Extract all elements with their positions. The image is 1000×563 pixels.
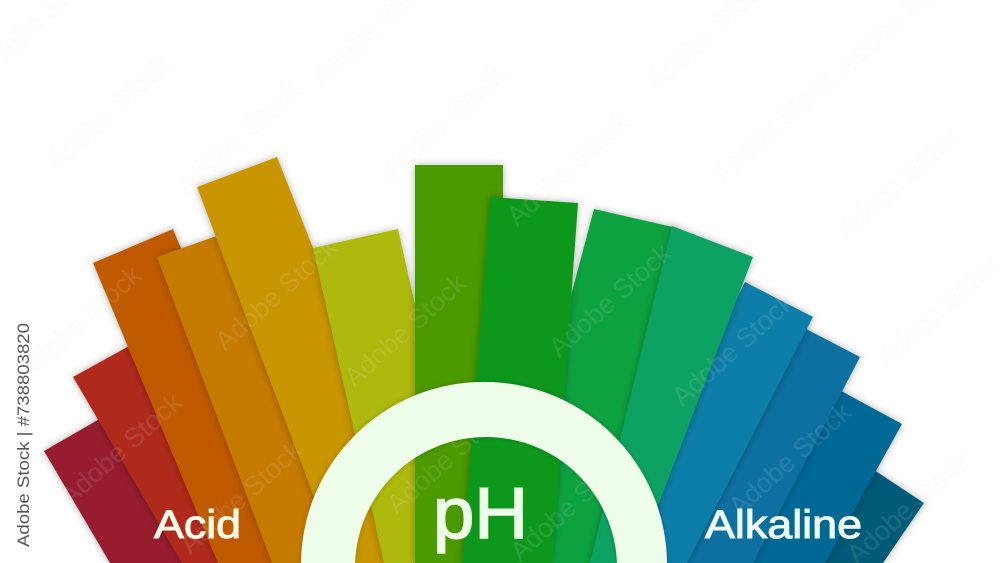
bar: red	[73, 340, 270, 563]
watermark pattern: Adobe Stock	[543, 238, 677, 363]
bar: dark blue	[720, 385, 902, 563]
bar: light blue	[600, 282, 813, 563]
label: pH: pH	[433, 474, 528, 554]
watermark pattern: Adobe Stock	[209, 232, 343, 357]
bar: mid blue	[650, 321, 860, 563]
bar: green	[462, 197, 578, 563]
watermark pattern: Adobe Stock	[504, 442, 638, 563]
pale ring around pH label	[301, 382, 667, 563]
label: Alkaline: Alkaline	[705, 503, 862, 547]
watermark pattern: Adobe Stock	[376, 60, 510, 185]
watermark pattern: Adobe Stock	[338, 268, 472, 393]
watermark pattern: Adobe Stock	[706, 65, 840, 190]
bar: amber	[197, 157, 438, 563]
watermark pattern: Adobe Stock	[831, 120, 965, 245]
watermark pattern: Adobe Stock	[381, 395, 515, 520]
watermark pattern: Adobe Stock	[13, 260, 147, 385]
watermark pattern: Adobe Stock	[174, 435, 308, 560]
watermark pattern: Adobe Stock	[501, 107, 635, 232]
stock credit, vertical: Adobe Stock | #738803820	[14, 323, 33, 547]
bar: dark amber	[157, 233, 350, 563]
watermark pattern: Adobe Stock	[171, 75, 305, 200]
fan of coloured pH bars	[44, 157, 924, 563]
bar: orange	[93, 229, 312, 563]
bar: deepest blue	[780, 461, 924, 563]
bar: leaf green	[415, 165, 503, 563]
watermark pattern: Adobe Stock	[723, 397, 857, 522]
bar: lime	[313, 229, 473, 563]
bar: teal green	[590, 226, 753, 563]
label: Acid: Acid	[154, 503, 241, 547]
watermark pattern: Adobe Stock	[41, 50, 175, 175]
watermark pattern: Adobe Stock	[54, 387, 188, 512]
watermark pattern: Adobe Stock	[666, 287, 800, 412]
bar: crimson	[44, 413, 200, 563]
bar: emerald green	[500, 209, 677, 563]
